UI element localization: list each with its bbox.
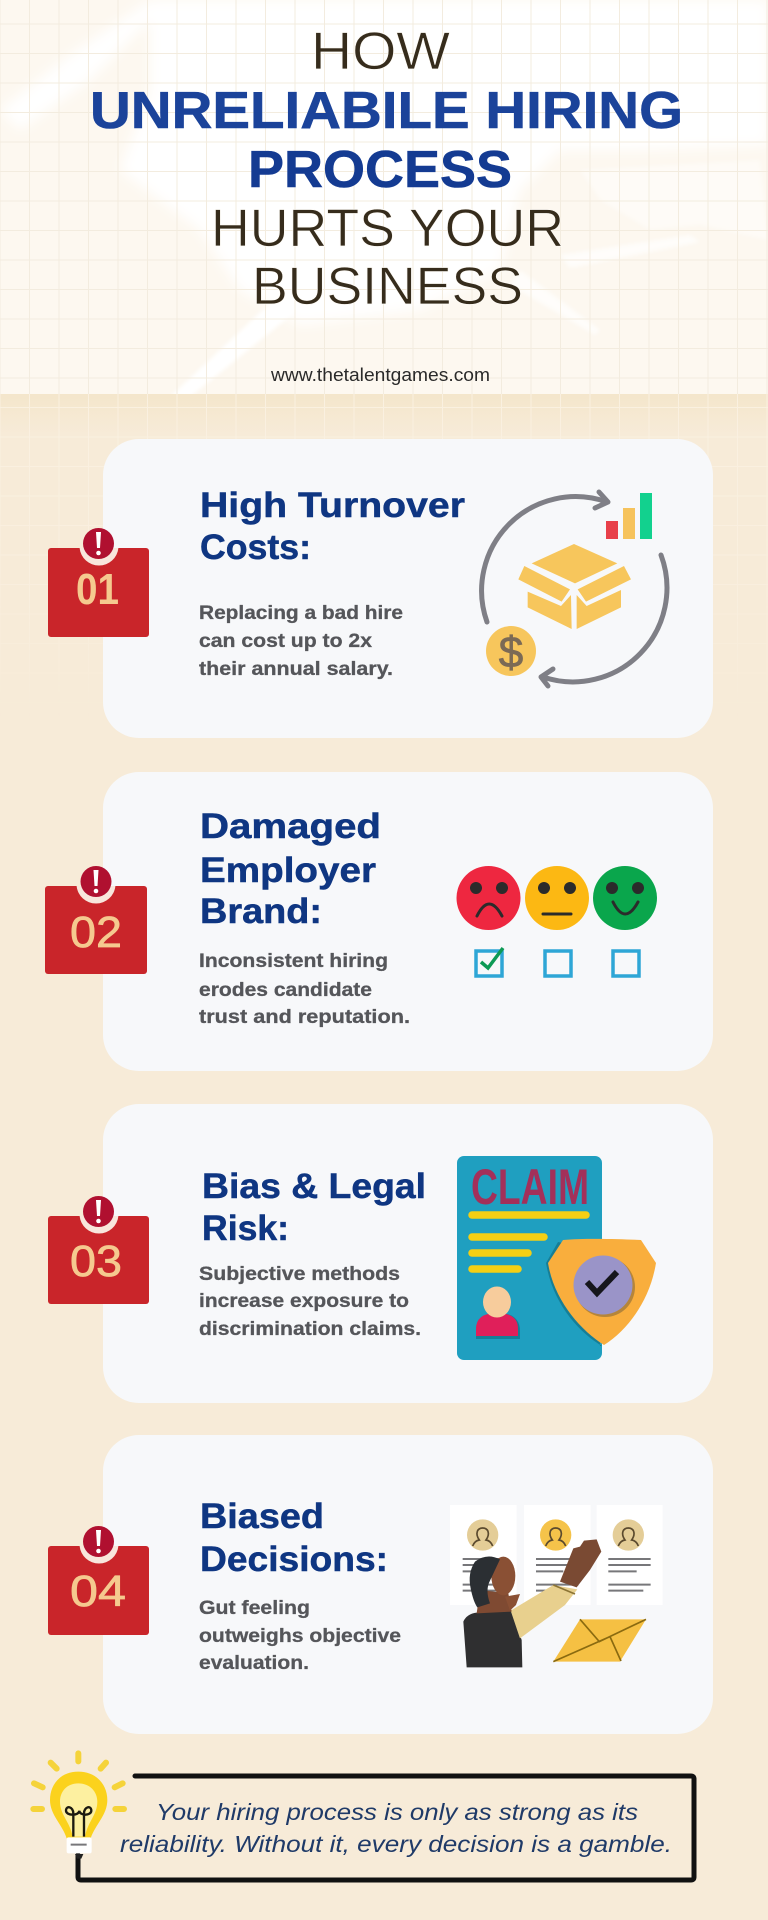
icon: claim document with shield xyxy=(457,1156,656,1360)
heading: high turnover costs: Costs: xyxy=(200,528,311,567)
badge 01: 01 xyxy=(76,565,119,614)
icon: claim document with shield: CLAIM xyxy=(471,1159,589,1215)
background: lower cream panel with fading grid xyxy=(0,394,768,458)
heading: biased decisions xyxy=(200,1497,388,1579)
heading: high turnover costs: High Turnover xyxy=(200,486,465,525)
icon: box with cycle arrows, coin and bars: $ xyxy=(499,628,523,677)
title: UNRELIABILE HIRING xyxy=(90,82,683,140)
icon: light bulb xyxy=(33,1753,124,1859)
title xyxy=(90,22,683,316)
text: replacing a bad hire: their annual salary. xyxy=(199,658,393,680)
website url: www.thetalentgames.com xyxy=(270,365,490,385)
heading: damaged employer brand: Employer xyxy=(200,851,376,890)
text: replacing a bad hire: can cost up to 2x xyxy=(199,630,372,652)
text: subjective methods: increase exposure to xyxy=(199,1290,409,1312)
title: HOW xyxy=(311,22,450,81)
callout frame xyxy=(78,1776,694,1880)
heading: damaged employer brand: Brand: xyxy=(200,892,322,931)
badge 02 xyxy=(45,866,147,974)
heading: bias and legal risk: Bias & Legal xyxy=(202,1167,426,1206)
text: replacing a bad hire xyxy=(199,602,403,680)
text: inconsistent hiring: Inconsistent hiring xyxy=(199,950,388,972)
text: subjective methods: discrimination claims. xyxy=(199,1318,421,1340)
heading: high turnover costs xyxy=(200,486,465,567)
text: gut feeling: evaluation. xyxy=(199,1652,309,1674)
panel: bias and legal risk xyxy=(103,1104,713,1403)
panel: damaged employer brand xyxy=(103,772,713,1071)
icon: rating faces and checkboxes xyxy=(456,866,657,976)
text: gut feeling: outweighs objective xyxy=(199,1625,401,1647)
text: subjective methods xyxy=(199,1263,421,1340)
badge 04: 04 xyxy=(70,1567,126,1616)
title: BUSINESS xyxy=(252,257,523,316)
badge 01 xyxy=(48,528,149,637)
text: inconsistent hiring: trust and reputation. xyxy=(199,1006,410,1028)
icon: box with cycle arrows, coin and bars xyxy=(482,492,667,686)
text: gut feeling xyxy=(199,1597,401,1674)
text: inconsistent hiring xyxy=(199,950,410,1028)
text: subjective methods: Subjective methods xyxy=(199,1263,400,1285)
text: gut feeling: Gut feeling xyxy=(199,1597,310,1619)
heading: biased decisions: Decisions: xyxy=(200,1540,388,1579)
heading: bias and legal risk xyxy=(202,1167,426,1248)
heading: damaged employer brand xyxy=(200,807,381,931)
heading: bias and legal risk: Risk: xyxy=(202,1209,289,1248)
callout text xyxy=(120,1799,672,1857)
title: PROCESS xyxy=(248,141,512,199)
callout text: reliability. Without it, every decision is a gamble. xyxy=(120,1831,672,1857)
background: upper light panel xyxy=(0,0,768,397)
badge 03: 03 xyxy=(70,1237,122,1286)
panel: biased decisions xyxy=(103,1435,713,1734)
heading: damaged employer brand: Damaged xyxy=(200,807,381,846)
text: inconsistent hiring: erodes candidate xyxy=(199,979,372,1001)
callout text: Your hiring process is only as strong as its xyxy=(156,1799,639,1825)
badge 03 xyxy=(48,1196,149,1304)
heading: biased decisions: Biased xyxy=(200,1497,324,1536)
badge 02: 02 xyxy=(70,908,122,957)
icon: person reviewing candidate resumes with envelope xyxy=(450,1505,663,1667)
title: HURTS YOUR xyxy=(211,199,564,258)
panel: high turnover costs xyxy=(103,439,713,738)
text: replacing a bad hire: Replacing a bad hire xyxy=(199,602,403,624)
badge 04 xyxy=(48,1526,149,1635)
